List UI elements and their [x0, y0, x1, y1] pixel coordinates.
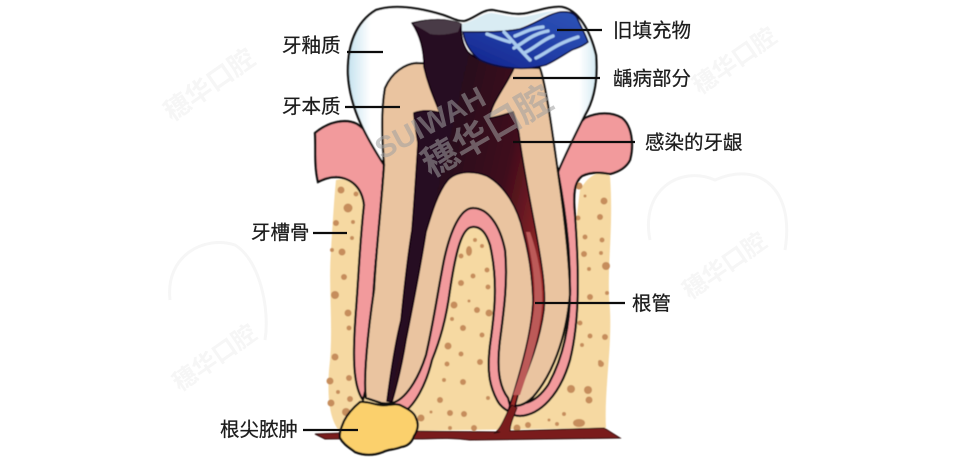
label: enamel [282, 35, 383, 57]
gum right and ligament [392, 114, 632, 416]
watermark latin name: SUIWAH [370, 81, 491, 166]
root interior arch [392, 208, 512, 430]
apical nerve [315, 405, 620, 440]
pulp chamber decay [387, 20, 545, 432]
enamel crown [348, 7, 597, 180]
bone spots [326, 182, 610, 432]
label: root canal: 根管 [632, 293, 671, 315]
watermark [370, 77, 560, 185]
label: infected gum: 感染的牙龈 [645, 132, 743, 154]
tooth diagram [315, 7, 632, 455]
faint repeated watermarks: 穗华口腔 [168, 320, 262, 397]
label: alveolar bone: 牙槽骨 [251, 222, 310, 244]
gum left [315, 121, 384, 400]
filling highlights [487, 27, 578, 60]
watermark brand name: 穗华口腔 [414, 77, 560, 185]
canal red highlight [513, 232, 542, 395]
dentin [365, 63, 570, 406]
enamel top tint [462, 11, 556, 32]
decay cavity cap [413, 20, 461, 35]
blue filling [463, 12, 588, 68]
label: alveolar bone [251, 222, 347, 244]
label: old filling: 旧填充物 [613, 20, 691, 42]
label: dentin: 牙本质 [282, 96, 341, 118]
faint repeated watermarks: 穗华口腔 [688, 23, 782, 100]
label: dentin [282, 96, 400, 118]
pink canal arch band [392, 208, 512, 413]
alveolar bone [326, 173, 611, 432]
label: old filling [557, 20, 691, 42]
inter-root bone spots [418, 238, 492, 431]
label: apical abscess: 根尖脓肿 [220, 419, 298, 441]
label: caries part: 龋病部分 [613, 68, 691, 90]
abscess [340, 402, 418, 455]
label: root canal [535, 293, 671, 315]
faint repeated watermarks: 穗华口腔 [158, 43, 261, 127]
faint repeated watermarks [158, 23, 787, 397]
label: apical abscess [220, 419, 358, 441]
label: enamel: 牙釉质 [282, 35, 341, 57]
faint repeated watermarks: 穗华口腔 [678, 228, 772, 305]
